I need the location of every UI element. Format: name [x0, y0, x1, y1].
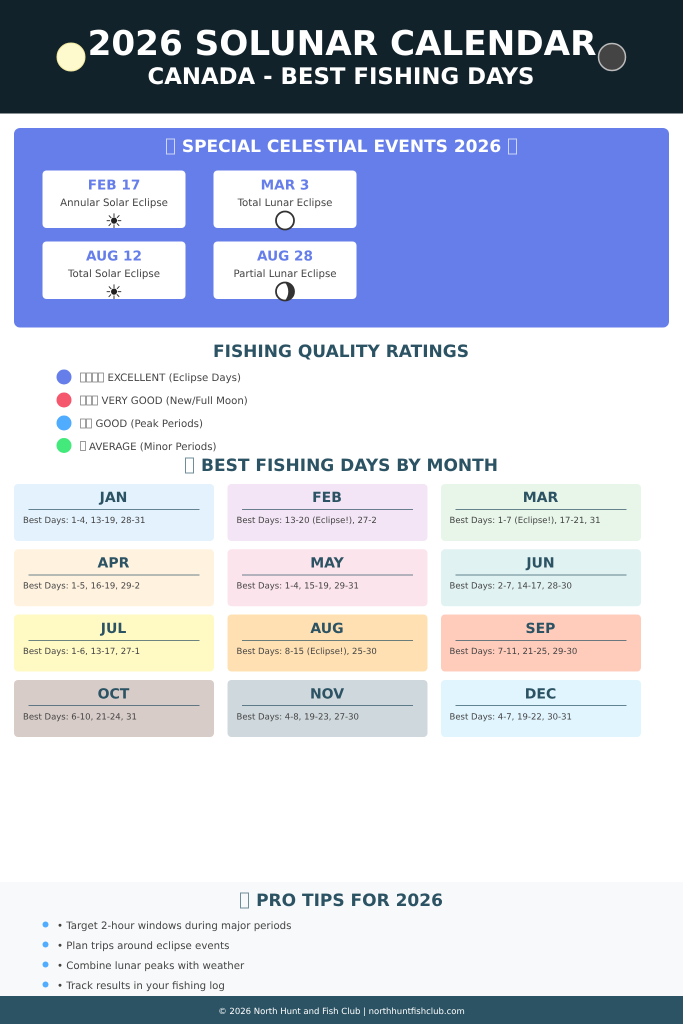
month card: October: [14, 680, 214, 737]
footer: © 2026 North Hunt and Fish Club | northhuntfishclub.com: [218, 1007, 465, 1017]
month card: April: [14, 549, 214, 606]
subtitle: CANADA - BEST FISHING DAYS: [148, 64, 534, 90]
rating: excellent: [56, 370, 241, 384]
rating: very good: VERY GOOD (New/Full Moon): [102, 396, 248, 407]
month card: March: MAR: [523, 490, 558, 506]
heading: fishing quality ratings: FISHING QUALITY RATINGS: [213, 342, 469, 362]
month card: August: Best Days: 8-15 (Eclipse!), 25-30: [236, 647, 377, 657]
month card: July: JUL: [100, 621, 126, 637]
event card: Feb 17: ☀: [105, 209, 123, 233]
event card: Mar 3: Total Lunar Eclipse: [237, 198, 332, 209]
legend: fishing quality ratings: [56, 370, 248, 453]
month card: March: [441, 484, 641, 541]
tip 1: • Target 2-hour windows during major periods: [57, 921, 291, 932]
month card: August: AUG: [310, 621, 344, 637]
rating: good: GOOD (Peak Periods): [96, 419, 203, 430]
event card: Aug 28: AUG 28: [257, 248, 313, 264]
month card: May: MAY: [310, 556, 345, 572]
month card: December: DEC: [525, 686, 556, 702]
month card: September: [441, 614, 641, 672]
month card: December: [441, 680, 641, 737]
rating: good: [56, 416, 203, 430]
month card: September: SEP: [526, 621, 555, 637]
icon: sun: [57, 43, 85, 71]
month card: April: Best Days: 1-5, 16-19, 29-2: [23, 582, 140, 592]
rating: excellent: EXCELLENT (Eclipse Days): [108, 373, 241, 384]
month card: May: [228, 549, 428, 606]
month card: March: Best Days: 1-7 (Eclipse!), 17-21, 31: [450, 516, 601, 526]
rating: average: [56, 438, 217, 453]
panel heading: SPECIAL CELESTIAL EVENTS 2026: [182, 137, 501, 157]
rating: very good: [56, 392, 248, 408]
event card: Feb 17: FEB 17: [88, 178, 140, 194]
rating: average: AVERAGE (Minor Periods): [89, 442, 217, 453]
tip 3: • Combine lunar peaks with weather: [57, 961, 245, 972]
month card: February: FEB: [312, 490, 342, 506]
month card: October: Best Days: 6-10, 21-24, 31: [23, 712, 137, 722]
month card: September: Best Days: 7-11, 21-25, 29-30: [450, 647, 577, 657]
month card: January: JAN: [99, 490, 127, 506]
heading: pro tips: PRO TIPS FOR 2026: [256, 891, 443, 911]
month card: November: Best Days: 4-8, 19-23, 27-30: [236, 712, 359, 722]
event card: Feb 17: Annular Solar Eclipse: [60, 198, 168, 209]
title: 2026 SOLUNAR CALENDAR: [88, 24, 596, 64]
month card: December: Best Days: 4-7, 19-22, 30-31: [450, 712, 572, 722]
footer: [0, 996, 683, 1024]
month card: June: JUN: [525, 556, 555, 572]
header banner: [0, 0, 683, 114]
event card: Aug 12: AUG 12: [86, 248, 142, 264]
month card: October: OCT: [98, 686, 130, 702]
panel: pro tips: [0, 882, 683, 996]
month card: November: NOV: [310, 686, 344, 702]
month card: February: [228, 484, 428, 541]
month card: July: Best Days: 1-6, 13-17, 27-1: [23, 647, 140, 657]
event card: Aug 28: [214, 242, 356, 300]
month card: January: Best Days: 1-4, 13-19, 28-31: [23, 516, 145, 526]
month card: February: Best Days: 13-20 (Eclipse!), 27-2: [236, 516, 377, 526]
event card: Aug 12: Total Solar Eclipse: [67, 269, 160, 280]
month card: June: [441, 549, 641, 606]
month card: November: [228, 680, 428, 737]
event card: Mar 3: [214, 170, 356, 230]
month card: April: APR: [98, 556, 130, 572]
tip 2: • Plan trips around eclipse events: [57, 941, 229, 952]
icon: dark moon: [598, 44, 626, 70]
heading: best fishing days by month: BEST FISHING DAYS BY MONTH: [201, 456, 498, 476]
month card: May: Best Days: 1-4, 15-19, 29-31: [236, 582, 359, 592]
event card: Feb 17: [42, 170, 186, 233]
month card: July: [14, 614, 214, 672]
month card: August: [228, 614, 428, 672]
panel: special celestial events: [14, 128, 669, 328]
event card: Aug 12: ☀: [105, 280, 123, 304]
event card: Mar 3: MAR 3: [261, 178, 309, 194]
event card: Aug 12: [42, 242, 186, 304]
month card: January: [14, 484, 214, 541]
tip 4: • Track results in your fishing log: [57, 981, 225, 992]
month card: June: Best Days: 2-7, 14-17, 28-30: [450, 582, 572, 592]
event card: Aug 28: Partial Lunar Eclipse: [233, 269, 337, 280]
